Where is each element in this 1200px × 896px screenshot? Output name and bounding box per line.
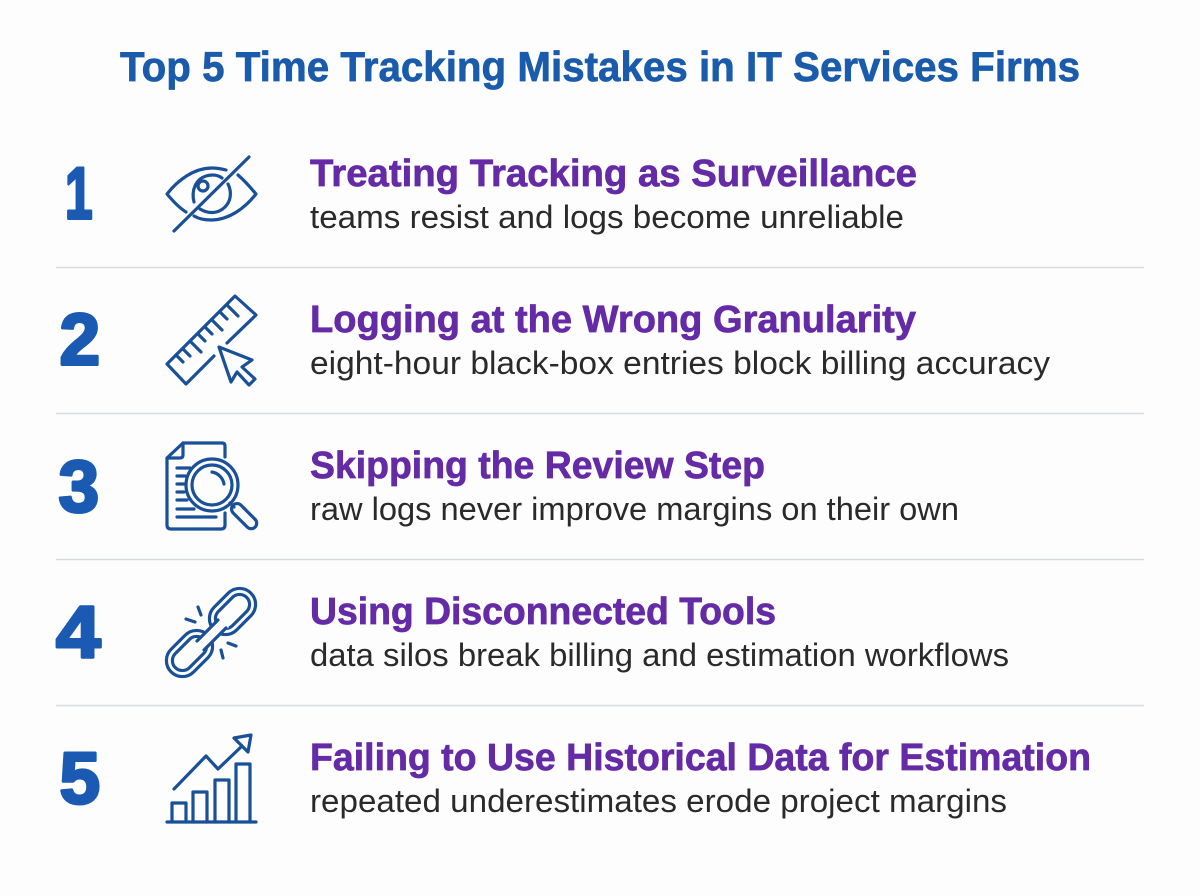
icon: ruler and cursor [167,296,256,385]
heading: Using Disconnected Tools [310,591,776,633]
number 5: 5 [60,738,100,820]
icon: crossed-out eye [167,157,256,231]
number 3: 3 [58,446,99,528]
description: eight-hour black-box entries block billing accuracy [310,345,1050,381]
item 4: using disconnected tools [56,582,1009,683]
icon: document with magnifier [167,443,259,531]
item 3: skipping the review step [58,443,959,531]
description: repeated underestimates erode project margins [310,783,1007,819]
heading: Treating Tracking as Surveillance [310,153,917,195]
title: Top 5 Time Tracking Mistakes in IT Services Firms [120,43,1080,90]
icon: rising bar chart with arrow [167,735,256,822]
number 4: 4 [56,593,101,674]
number 2: 2 [60,300,100,380]
heading: Skipping the Review Step [310,445,765,487]
item 2: logging at the wrong granularity [60,296,1050,385]
heading: Failing to Use Historical Data for Estimation [310,737,1091,779]
description: raw logs never improve margins on their own [310,491,959,527]
description: teams resist and logs become unreliable [310,199,904,235]
item 5: failing to use historical data for estimation [60,735,1091,822]
description: data silos break billing and estimation workflows [310,637,1009,673]
number 1: 1 [65,153,93,235]
item 1: treating tracking as surveillance [65,153,917,235]
icon: chain link with break marks [160,582,262,683]
heading: Logging at the Wrong Granularity [310,299,916,341]
